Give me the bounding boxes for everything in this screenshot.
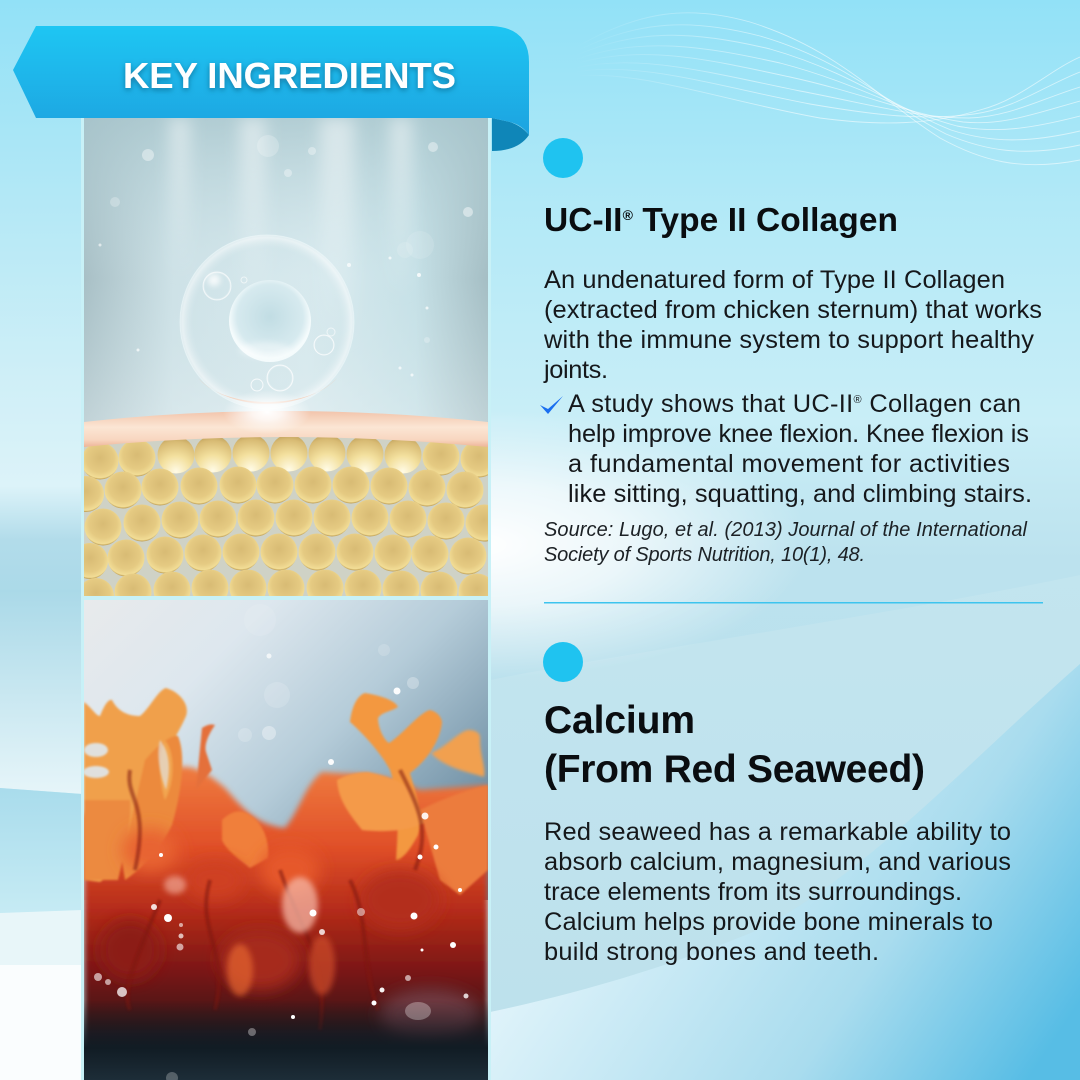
ground [84,1000,488,1080]
source citation: Society of Sports Nutrition, 10(1), 48. [544,544,865,566]
section: calcium [543,642,1011,966]
study finding [568,390,1032,508]
description: Calcium helps provide bone minerals to [544,908,993,936]
study finding: like sitting, squatting, and climbing stairs. [568,480,1032,508]
panel: seaweed illustration [83,600,488,1080]
upper orange fronds [84,688,488,895]
sky backdrop [84,118,488,438]
contact glow [227,394,308,431]
source citation [544,519,1028,566]
study finding: A study shows that UC-II [568,390,853,418]
bullet dot [543,642,583,682]
bokeh [238,644,419,765]
study finding: a fundamental movement for activities [568,450,1010,478]
light rays [164,118,418,262]
dark red streaks [127,770,422,1030]
heading: Type II Collagen [633,202,898,239]
white particles [94,812,468,1080]
water backdrop [84,600,488,900]
ribbon curl [492,118,529,151]
study finding: Collagen can [862,390,1021,418]
description: build strong bones and teeth. [544,938,879,966]
heading: UC-II [544,202,622,239]
skin layer [84,411,488,447]
study finding: ® [854,394,862,406]
panel: collagen illustration [84,118,488,596]
banner: key ingredients [13,26,529,151]
gold cells [84,437,488,596]
main seaweed mass [84,767,488,1080]
description: with the immune system to support healthy [543,326,1034,354]
divider [544,602,1043,604]
large bubble [180,235,354,409]
gold cell layer [84,436,488,596]
title: KEY INGREDIENTS [123,55,456,96]
source citation: Source: Lugo, et al. (2013) Journal of the International [544,519,1028,541]
heading: (From Red Seaweed) [544,748,925,791]
icon: check mark [540,396,563,414]
description [543,266,1042,384]
description: absorb calcium, magnesium, and various [544,848,1011,876]
image frame [81,112,491,1080]
study finding: help improve knee flexion. Knee flexion is [568,420,1029,448]
heading: Calcium [544,699,695,742]
section: UC-II collagen [540,138,1042,566]
bullet dot [543,138,583,178]
description: An undenatured form of Type II Collagen [544,266,1005,294]
ribbon body [13,26,529,135]
pale highlights [164,876,335,996]
description: joints. [543,356,608,384]
decorative wave lines [575,13,1080,165]
description: Red seaweed has a remarkable ability to [544,818,1011,846]
description [544,818,1011,966]
heading: ® [623,207,634,223]
heading [544,699,925,791]
bokeh particles [98,135,473,376]
colour patches [100,828,480,1041]
description: (extracted from chicken sternum) that works [544,296,1042,324]
description: trace elements from its surroundings. [544,878,962,906]
sky gaps in fronds [83,740,169,790]
